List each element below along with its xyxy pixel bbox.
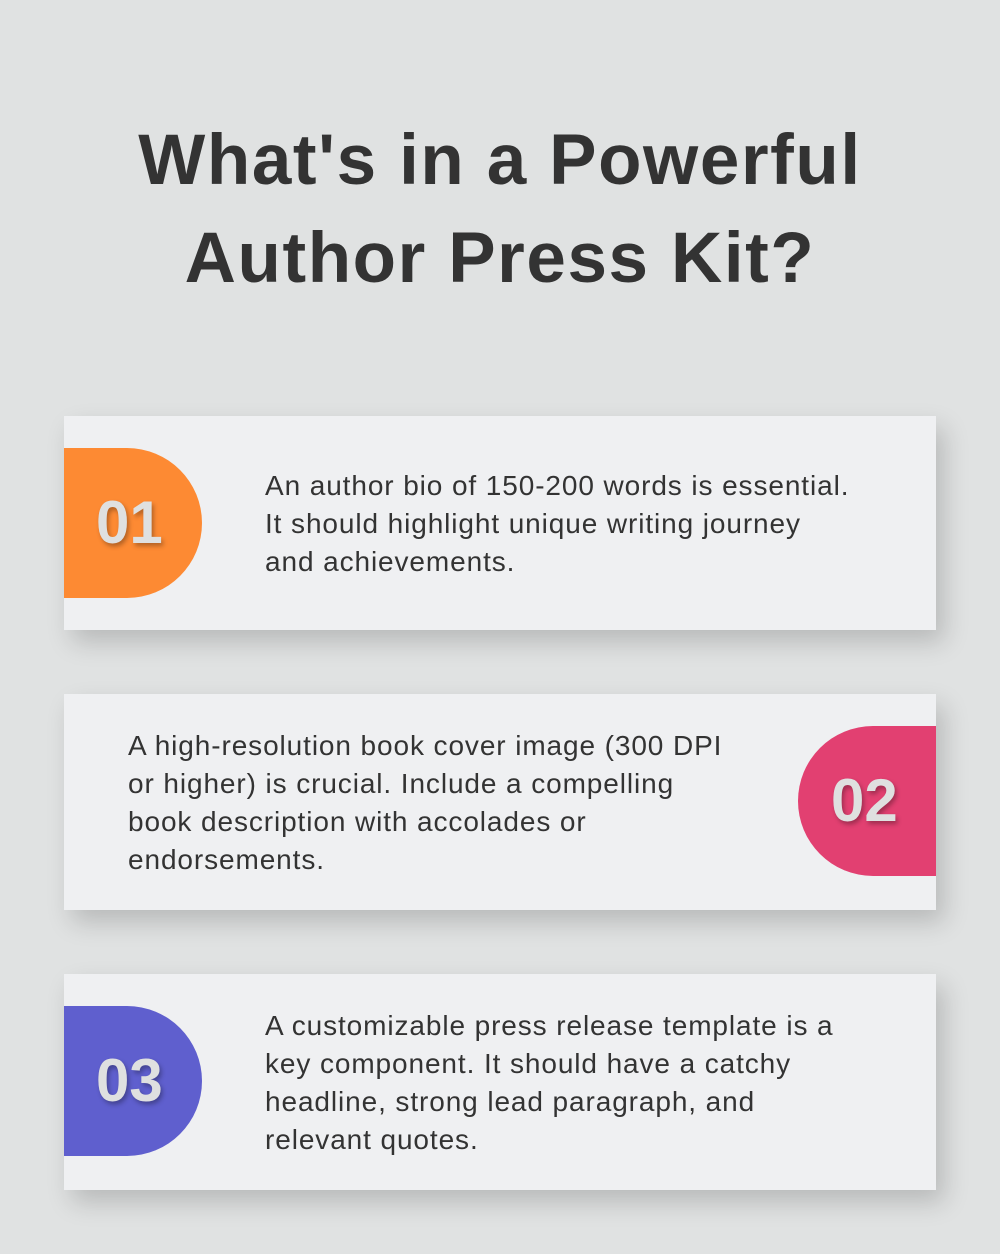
badge 01 [64, 448, 202, 598]
title: What's in a Powerful [138, 121, 862, 200]
text 1: An author bio of 150-200 words is essential. It should highlight unique writing journey and achievements. [265, 470, 849, 577]
badge 02 [798, 726, 936, 876]
card 1 [64, 416, 936, 630]
card 3 [64, 974, 936, 1190]
text 3: A customizable press release template is a key component. It should have a catchy headline, strong lead paragraph, and relevant quotes. [265, 1010, 834, 1155]
title [138, 121, 862, 298]
badge 01: 01 [96, 489, 163, 556]
title: Author Press Kit? [185, 219, 815, 298]
badge 03: 03 [96, 1047, 163, 1114]
card 2 [64, 694, 936, 910]
badge 02: 02 [831, 767, 898, 834]
badge 03 [64, 1006, 202, 1156]
text 2: A high-resolution book cover image (300 DPI or higher) is crucial. Include a compelling book description with accolades or endorsements. [128, 730, 722, 875]
